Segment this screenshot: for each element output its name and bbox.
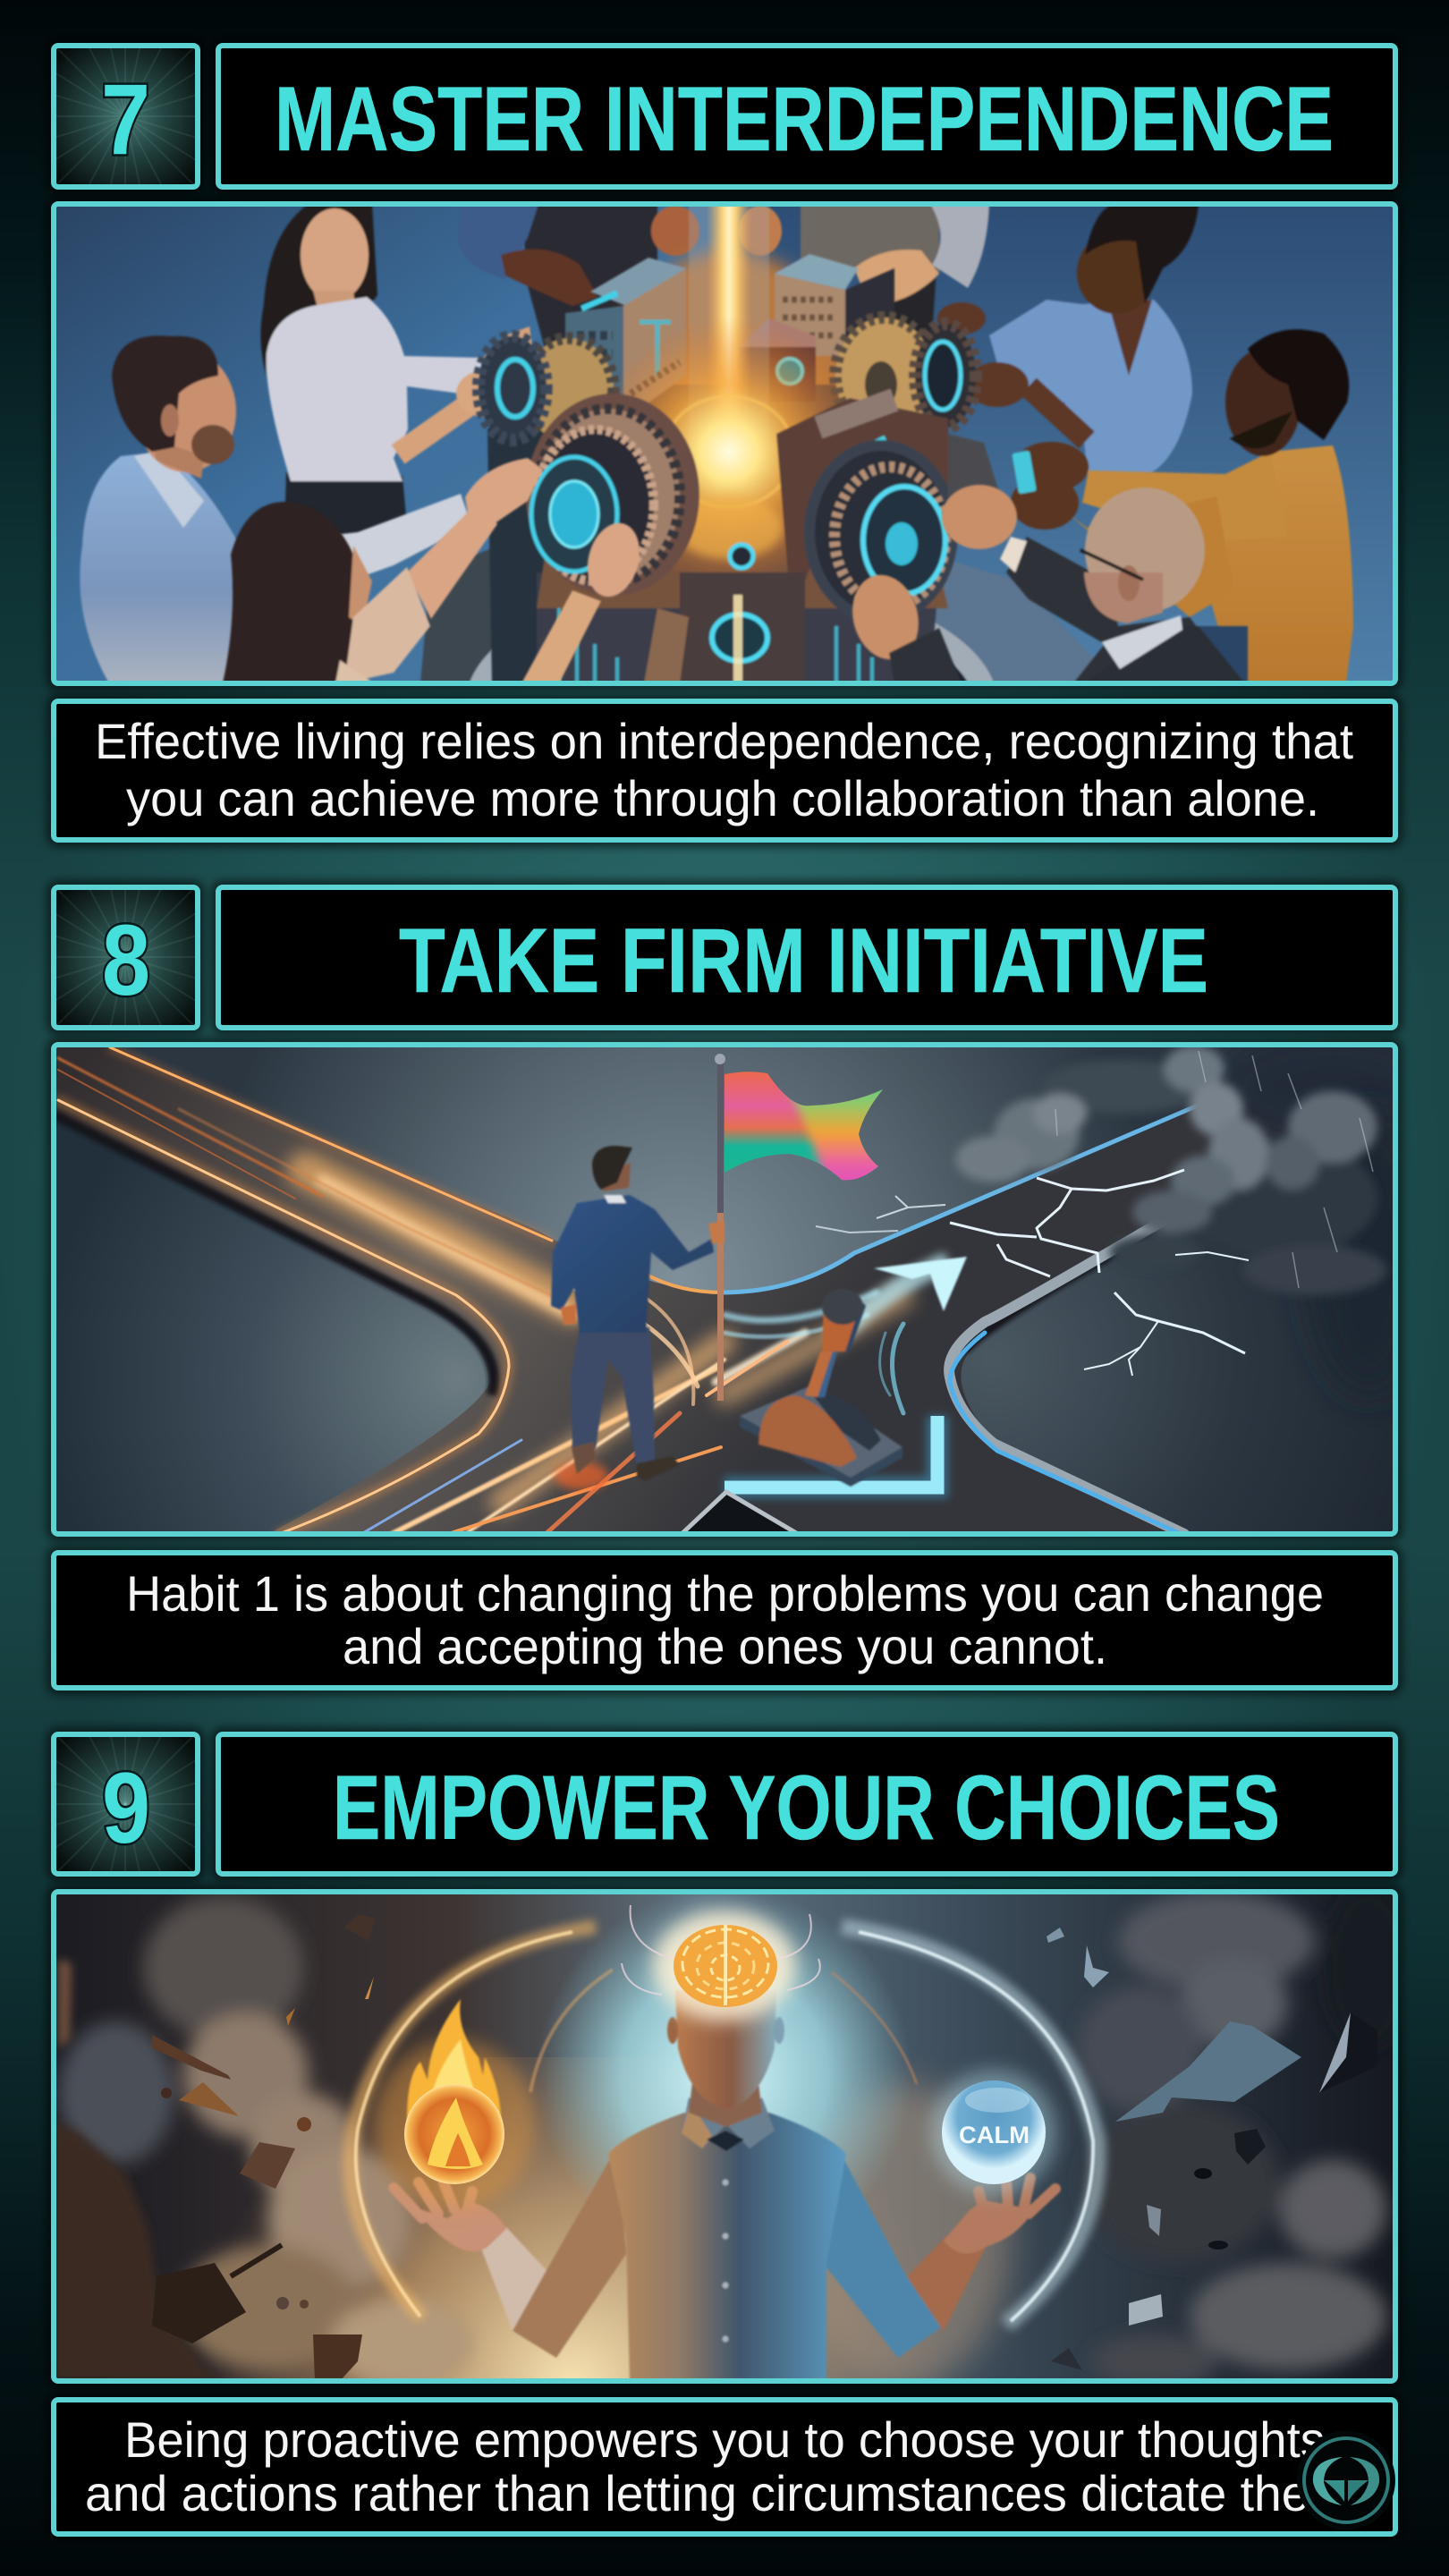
number badge 8 (36, 872, 215, 1042)
number badge 9 (36, 1719, 215, 1889)
caption 9 (54, 2400, 1395, 2534)
cracked ground and lightning (816, 1170, 1249, 1376)
section 7: master interdependence (36, 31, 1395, 840)
person: woman in white blouse (260, 204, 533, 537)
machine (479, 204, 1002, 683)
caption 8: Habit 1 is about changing the problems you can change (126, 1565, 1324, 1622)
calm arc (832, 1927, 1098, 2325)
central energy beam (614, 207, 844, 572)
illustration 9 frame (54, 1892, 1395, 2381)
calm orb: CALM (959, 2122, 1030, 2148)
lower circuit column (559, 545, 872, 683)
caption 7 (54, 701, 1395, 840)
caption 7: you can achieve more through collaboration than alone. (126, 770, 1319, 826)
left clouds (58, 1896, 474, 2388)
sleeves (513, 2147, 626, 2358)
flying debris right (1046, 1928, 1377, 2370)
flying debris left (152, 1914, 376, 2381)
person: bald man with glasses (843, 485, 1248, 683)
fire arc (351, 1927, 613, 2318)
man in suit (551, 1146, 724, 1481)
right upper block (738, 254, 894, 402)
title bar 7 (218, 46, 1395, 187)
caption 8 (54, 1553, 1395, 1688)
right clouds (1078, 1887, 1413, 2388)
warm and cool light (54, 1887, 1038, 2388)
collar (682, 2097, 775, 2148)
blue path edges (723, 1102, 1206, 1534)
caption 9: Being proactive empowers you to choose your thoughts (124, 2411, 1325, 2468)
forearms (479, 2227, 556, 2343)
person: top right behind machine (739, 207, 991, 340)
small gears (479, 318, 976, 442)
large right gear (776, 398, 1002, 619)
gear lever (740, 1289, 902, 1487)
logo badge (1297, 2431, 1395, 2529)
illustration: team assembling a glowing machine (56, 207, 1393, 681)
left upper block (565, 258, 686, 420)
left pool (54, 1116, 491, 1534)
person: top left behind machine (460, 207, 701, 347)
title bar 8: TAKE FIRM INITIATIVE (399, 910, 1208, 1012)
section 9: empower your choices (36, 1719, 1413, 2534)
illustration: choosing a path at a crossroads (54, 1024, 1449, 1534)
right pool (961, 1163, 1395, 1534)
illustration 7 frame (54, 204, 1395, 683)
caption 8: and accepting the ones you cannot. (343, 1618, 1107, 1674)
road junction notch (682, 1492, 798, 1534)
road (54, 1045, 1395, 1534)
number badge 7 (51, 43, 200, 190)
section 8: take firm initiative (36, 872, 1449, 1688)
orange light trails (58, 1047, 903, 1534)
large left gear (526, 394, 699, 596)
right hand (944, 2178, 1055, 2254)
fire orb (374, 1999, 535, 2209)
person: man in pale blue shirt (80, 335, 543, 683)
person: woman at front (223, 499, 648, 683)
person: man in orange sweater (1011, 329, 1353, 683)
number badge 7: 7 (101, 64, 150, 175)
person: woman in blue blouse (937, 204, 1199, 474)
flagpole (715, 1054, 725, 1401)
rainbow flag (720, 1064, 894, 1190)
neck and head (689, 2075, 762, 2127)
left hand (394, 2182, 506, 2251)
storm clouds (955, 1024, 1449, 1395)
person (479, 1990, 986, 2381)
title bar 9 (218, 1734, 1395, 1874)
cyan decision arrow (724, 1257, 967, 1487)
illustration: man balancing fire and calm (54, 1887, 1413, 2388)
illustration 8 frame (54, 1045, 1395, 1534)
caption 9: and actions rather than letting circumstances dictate them. (85, 2465, 1364, 2521)
number badge 9: 9 (102, 1752, 150, 1864)
title bar 8 (218, 887, 1395, 1028)
platform (419, 548, 1093, 681)
number badge 8: 8 (102, 904, 150, 1016)
shirt (608, 2113, 846, 2381)
glowing brain (622, 1905, 820, 2021)
dark rocks at left (54, 1959, 215, 2381)
caption 7: Effective living relies on interdependence, recognizing that (95, 713, 1353, 769)
calm orb (931, 2070, 1056, 2195)
